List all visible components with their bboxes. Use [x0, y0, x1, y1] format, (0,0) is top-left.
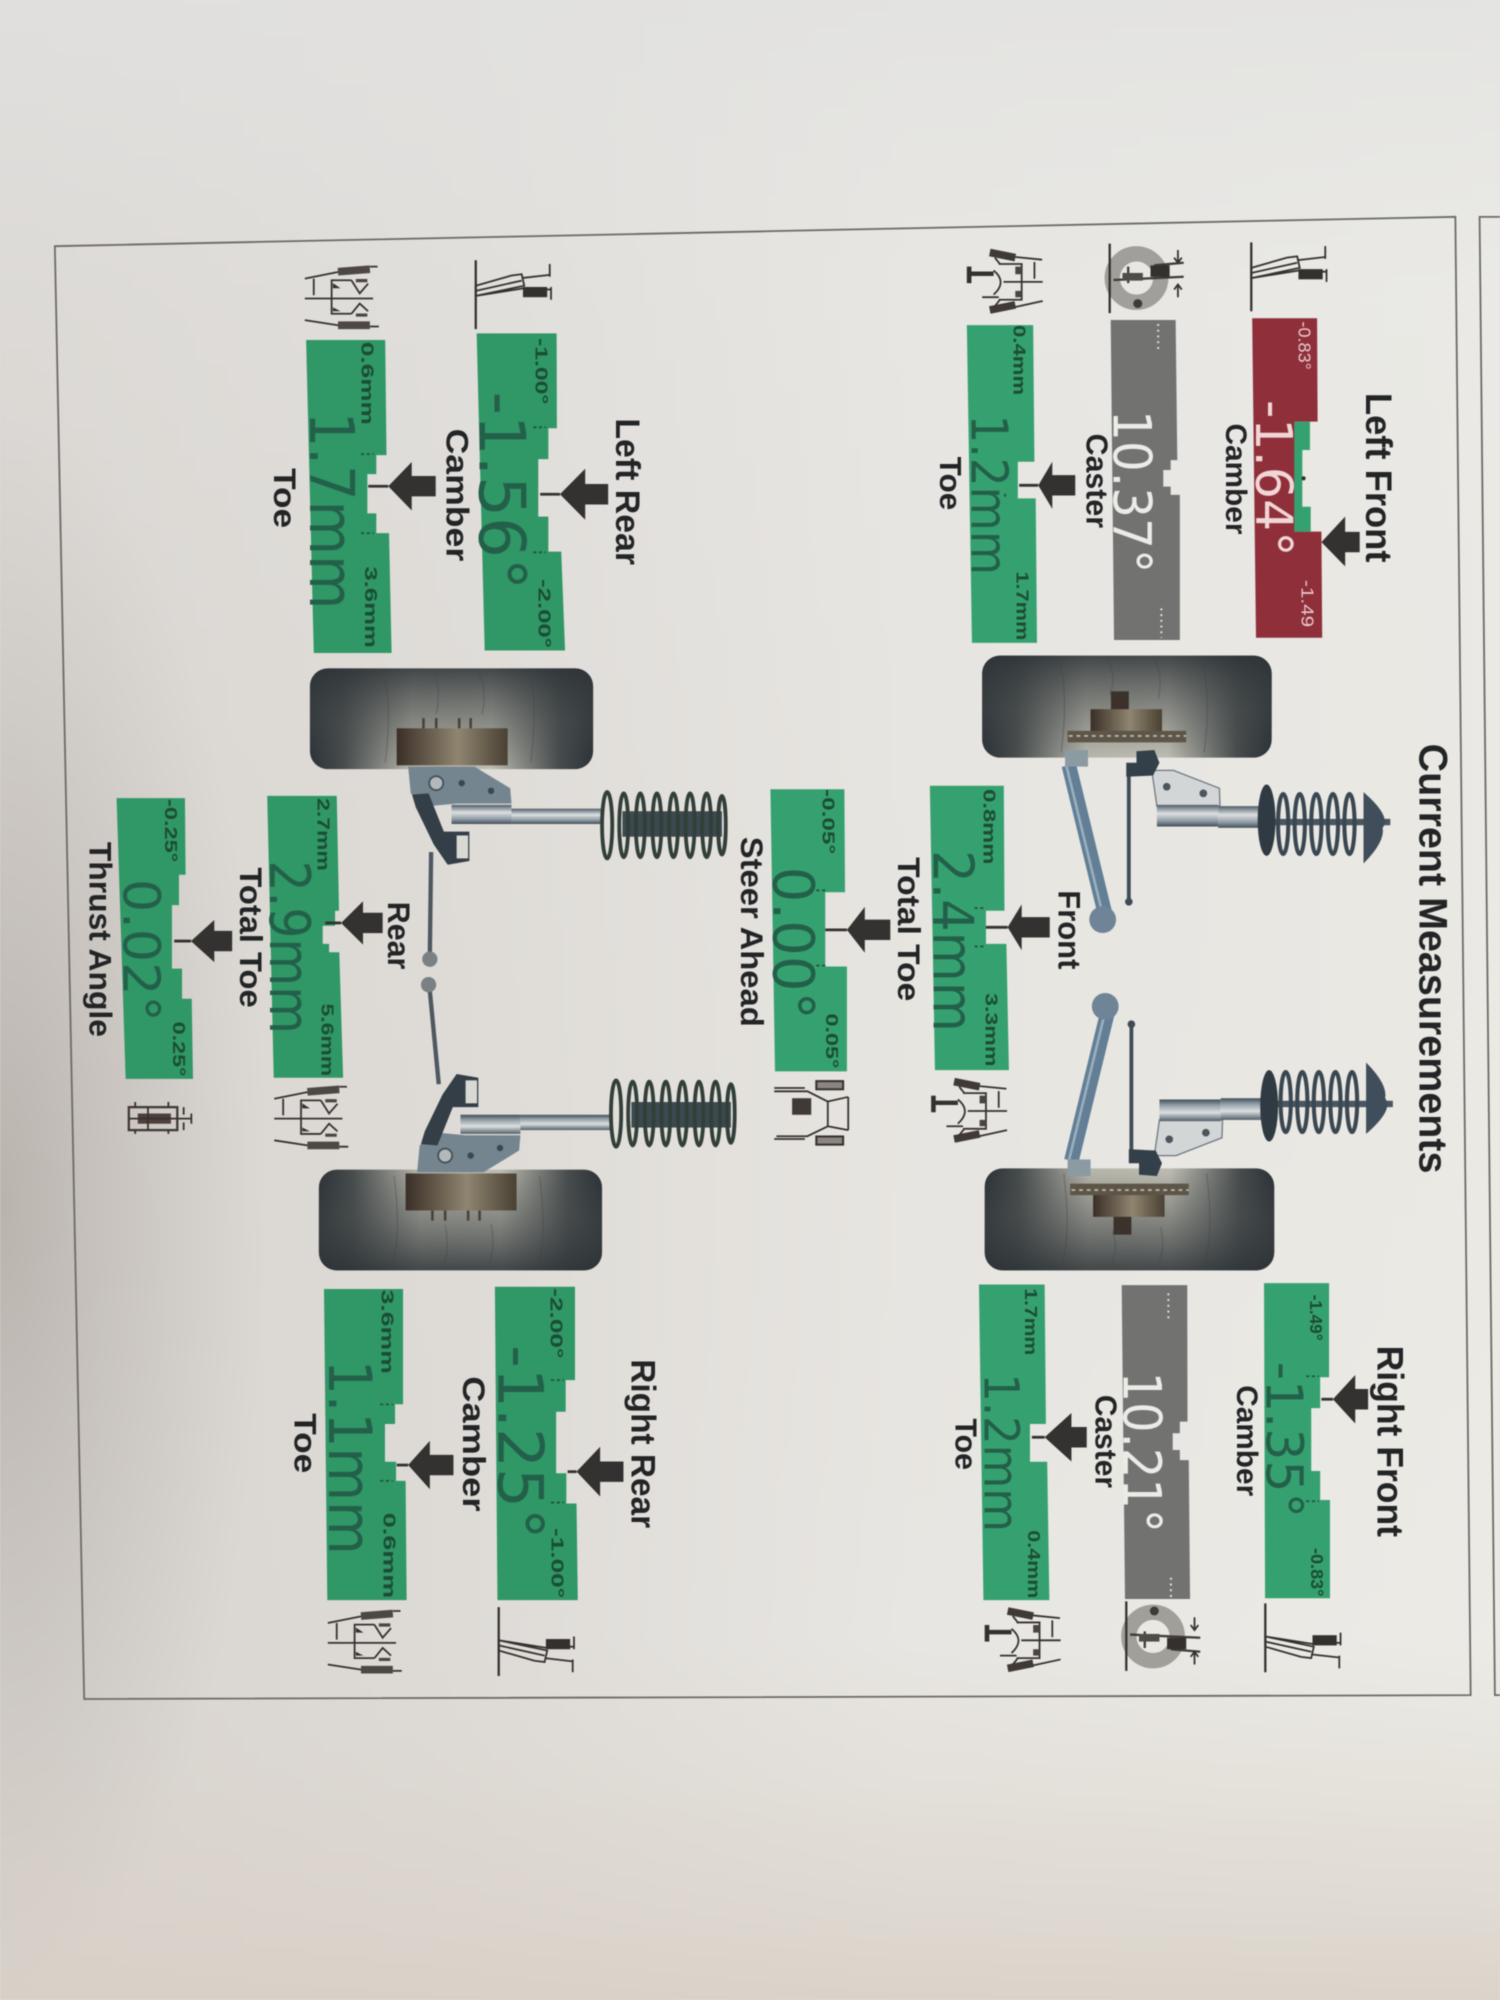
label: total toe: Total Toe — [233, 867, 269, 1008]
label: front: Front — [1052, 890, 1088, 970]
gauge: right front caster — [1111, 1285, 1190, 1605]
label: camber: Camber — [1230, 1385, 1263, 1496]
gauge: left front toe — [959, 325, 1075, 643]
heading: left rear: Left Rear — [608, 418, 646, 565]
gauge: right rear toe: 0.6mm — [379, 1513, 399, 1598]
gauge: right rear camber: -2.00° — [547, 1288, 567, 1358]
gauge: front total toe — [920, 786, 1050, 1070]
icon: camber — [1251, 242, 1327, 311]
gauge: right rear toe: 1.1mm — [314, 1360, 384, 1555]
gauge: right front caster: 10.21° — [1111, 1372, 1172, 1533]
gauge: rear total toe: 2.9mm — [256, 860, 321, 1034]
icon: caster — [1110, 244, 1184, 313]
gauge: right front camber: -1.49° — [1306, 1295, 1326, 1341]
gauge: right front toe: 1.2mm — [973, 1373, 1029, 1532]
icon: steer ahead — [774, 1081, 848, 1145]
panel: rear axle — [82, 668, 735, 1270]
label: camber: Camber — [439, 429, 475, 561]
gauge: right rear toe: 3.6mm — [377, 1290, 397, 1374]
panel: left rear — [267, 260, 646, 653]
gauge: left front toe: 0.4mm — [1009, 325, 1029, 395]
gauge: left front camber: -1.64° — [1243, 400, 1302, 557]
gauge: thrust angle: 0.25° — [169, 1022, 189, 1077]
illustration: left front suspension — [982, 656, 1390, 933]
gauge: left rear camber: -2.00° — [534, 579, 554, 648]
gauge: left front camber: -1.49 — [1298, 580, 1318, 627]
illustration: left rear suspension — [310, 668, 726, 865]
gauge: steer ahead — [760, 789, 890, 1071]
label: caster: Caster — [1089, 1395, 1123, 1488]
gauge: front total toe: 2.4mm — [920, 850, 985, 1032]
title: Current Measurements — [1411, 744, 1455, 1173]
label: toe: Toe — [288, 1413, 324, 1473]
gauge: left rear camber: -1.56° — [464, 392, 538, 590]
icon: camber — [476, 260, 551, 329]
gauge: left rear toe: 0.6mm — [358, 342, 378, 425]
illustration: rear axle link — [421, 852, 439, 1084]
gauge: right front toe — [973, 1284, 1087, 1600]
label: toe: Toe — [948, 1418, 982, 1470]
gauge: thrust angle: 0.02° — [111, 879, 170, 1022]
gauge: steer ahead: 0.00° — [760, 867, 827, 1020]
label: caster: Caster — [1080, 434, 1114, 528]
icon: caster — [1126, 1601, 1200, 1671]
panel: right rear — [288, 1287, 661, 1676]
panel: left front — [933, 242, 1399, 643]
gauge: right rear camber — [484, 1287, 623, 1600]
label: rear: Rear — [381, 902, 417, 969]
gauge: steer ahead: -0.05° — [819, 789, 839, 854]
gauge: right rear camber: -1.00° — [548, 1528, 568, 1598]
icon: toe — [967, 253, 1043, 310]
icon: thrust angle — [129, 1102, 191, 1134]
heading: left front: Left Front — [1358, 393, 1399, 562]
icon: toe — [328, 1611, 402, 1671]
label: camber: Camber — [456, 1376, 492, 1511]
gauge: right front camber: -1.35° — [1254, 1362, 1313, 1518]
gauge: left front caster — [1100, 320, 1180, 640]
label: total toe: Total Toe — [891, 857, 927, 1001]
gauge: thrust angle: -0.25° — [161, 799, 181, 862]
illustration: right rear suspension — [319, 1074, 735, 1270]
gauge: rear total toe: 2.7mm — [314, 798, 334, 871]
main frame — [55, 217, 1471, 1699]
panel: front axle — [734, 656, 1393, 1270]
heading: right front: Right Front — [1370, 1346, 1411, 1537]
label: toe: Toe — [267, 468, 303, 528]
gauge: left front toe: 1.2mm — [959, 415, 1018, 575]
gauge: left rear toe: 1.7mm — [295, 412, 366, 609]
panel: right front — [948, 1283, 1411, 1672]
gauge: left front toe: 1.7mm — [1013, 571, 1033, 640]
gauge: left front camber — [1243, 318, 1360, 638]
gauge: left front camber: -0.83° — [1294, 321, 1314, 370]
icon: camber — [499, 1607, 574, 1676]
label: toe: Toe — [933, 457, 967, 510]
gauge: right front toe: 0.4mm — [1024, 1530, 1044, 1598]
icon: total toe — [274, 1087, 348, 1147]
gauge: rear total toe — [256, 796, 383, 1078]
gauge: left rear camber — [464, 333, 608, 651]
gauge: right front toe: 1.7mm — [1021, 1288, 1041, 1355]
label: camber: Camber — [1219, 423, 1252, 534]
icon: toe — [305, 267, 379, 327]
gauge: left front caster: 10.37° — [1100, 410, 1161, 573]
icon: toe — [985, 1611, 1061, 1668]
gauge: front total toe: 0.8mm — [979, 789, 999, 864]
label: thrust angle: Thrust Angle — [82, 842, 118, 1037]
gauge: left rear camber: -1.00° — [532, 338, 552, 404]
label: steer ahead: Steer Ahead — [734, 837, 770, 1027]
icon: total toe — [931, 1082, 1007, 1139]
gauge: steer ahead: 0.05° — [822, 1014, 842, 1068]
gauge: right front camber: -0.83° — [1307, 1548, 1327, 1596]
heading: right rear: Right Rear — [623, 1359, 661, 1528]
gauge: right rear toe — [314, 1289, 453, 1600]
gauge: rear total toe: 5.6mm — [317, 1003, 337, 1076]
gauge: thrust angle — [111, 798, 232, 1079]
gauge: front total toe: 3.3mm — [982, 993, 1002, 1066]
gauge: left rear toe: 3.6mm — [361, 566, 381, 648]
gauge: right rear camber: -1.25° — [484, 1345, 557, 1540]
icon: camber — [1265, 1603, 1341, 1672]
next page frame edge — [1480, 217, 1500, 1695]
gauge: right front camber — [1254, 1283, 1368, 1598]
gauge: left rear toe — [295, 340, 436, 653]
illustration: right front suspension — [985, 993, 1393, 1270]
